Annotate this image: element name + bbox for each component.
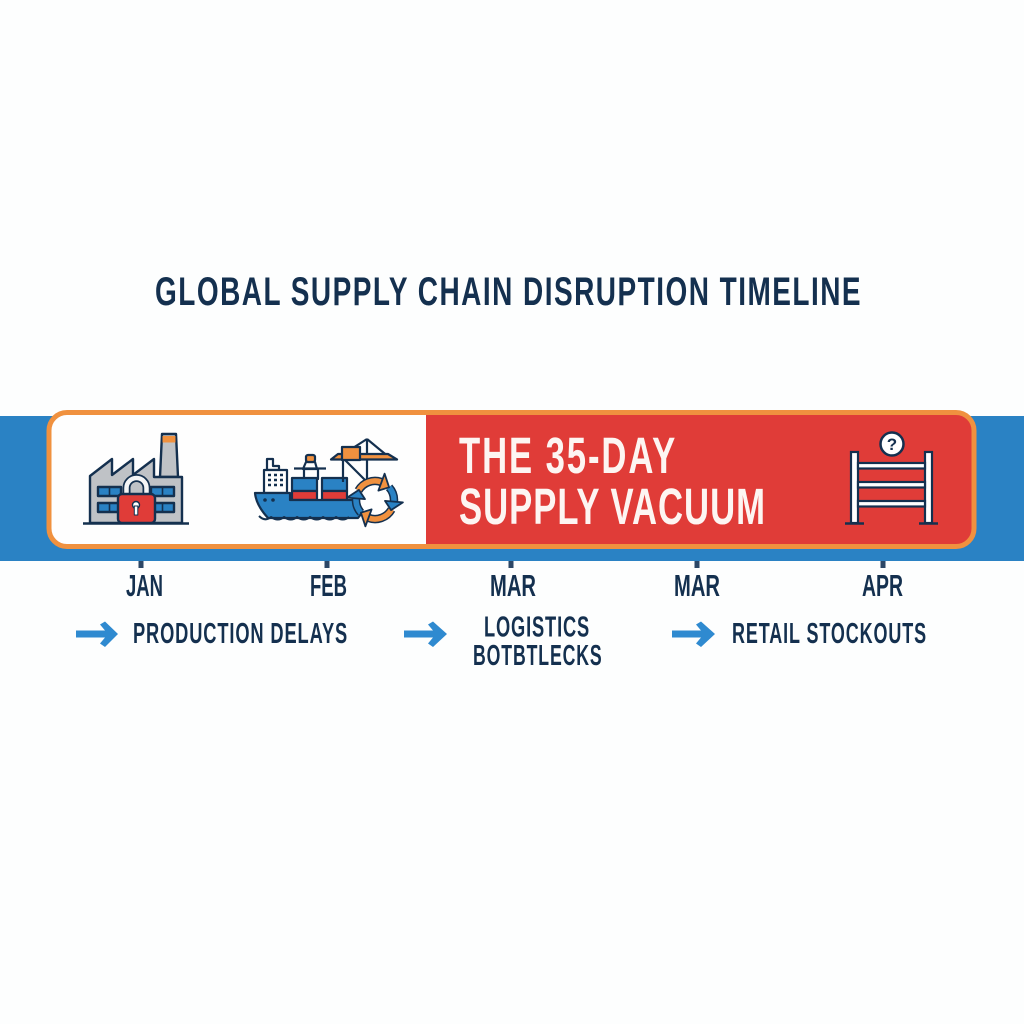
arrow: to production delays: [76, 622, 118, 647]
title: GLOBAL SUPPLY CHAIN DISRUPTION TIMELINE: [155, 270, 861, 314]
panel: timeline highlight: [49, 412, 974, 546]
month labels: APR: [862, 568, 903, 603]
arrow: to logistics bottlenecks: [404, 622, 447, 647]
recycle ring: [347, 474, 403, 526]
heading: the 35-day supply vacuum: THE 35-DAY: [459, 429, 675, 485]
icon: container ship with crane: [255, 439, 403, 526]
month labels: JAN: [126, 568, 163, 603]
month labels: FEB: [310, 568, 347, 603]
heading: the 35-day supply vacuum: SUPPLY VACUUM: [459, 480, 765, 536]
label: logistics bottlenecks: [473, 611, 602, 672]
label: logistics bottlenecks: LOGISTICS: [484, 611, 589, 644]
arrow: to retail stockouts: [672, 622, 715, 647]
label: logistics bottlenecks: BOTBTLECKS: [473, 640, 602, 672]
month labels: MAR: [674, 568, 720, 603]
panel border: [49, 412, 974, 546]
heading: the 35-day supply vacuum: [459, 429, 765, 536]
icon: empty shelf with question mark: ?: [887, 435, 897, 454]
label: production delays: PRODUCTION DELAYS: [133, 618, 347, 650]
label: retail stockouts: RETAIL STOCKOUTS: [732, 618, 926, 650]
timeline tick marks: [141, 561, 883, 568]
month labels: [126, 568, 903, 603]
panel: red section: [426, 412, 974, 546]
blue timeline band: [0, 416, 1024, 561]
month labels: MAR: [490, 568, 536, 603]
panel: white section: [50, 412, 426, 546]
icon: empty shelf with question mark: [845, 432, 938, 524]
icon: locked factory: [83, 434, 189, 524]
